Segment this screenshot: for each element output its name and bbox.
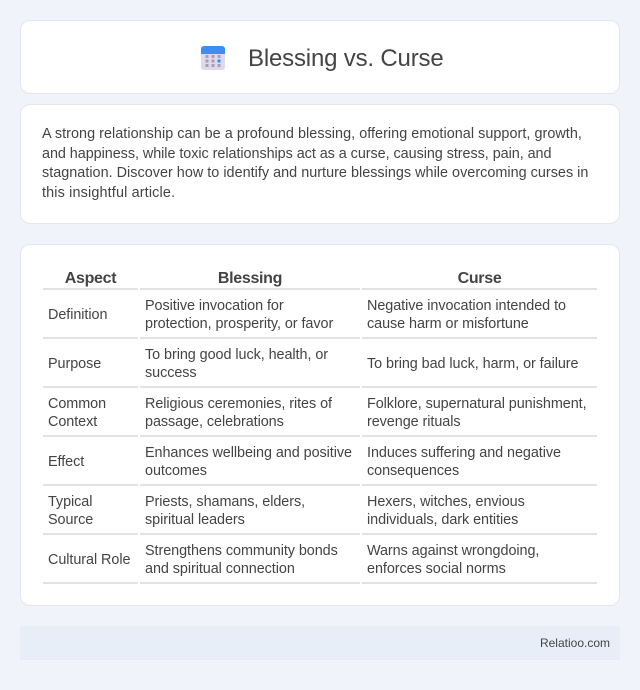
row: Cultural Role xyxy=(48,543,539,577)
intro text: this insightful article. xyxy=(42,185,175,201)
row: Purpose: Purpose xyxy=(48,356,101,372)
table header: Aspect xyxy=(65,270,116,287)
table header: Curse xyxy=(458,270,501,287)
intro text: stagnation. Discover how to identify and nurture blessings while overcoming curses in xyxy=(42,165,588,181)
title: Blessing vs. Curse xyxy=(248,45,444,72)
row: Cultural Role: Strengthens community bonds xyxy=(145,543,338,559)
row: Effect: consequences xyxy=(367,463,459,479)
row: Common Context: revenge rituals xyxy=(367,414,460,430)
row: Cultural Role: and spiritual connection xyxy=(145,561,295,577)
row: Typical Source: Typical xyxy=(48,494,92,510)
row: Definition: protection, prosperity, or favor xyxy=(145,316,333,332)
intro text: and happiness, while toxic relationships act as a curse, causing stress, pain, and xyxy=(42,146,551,162)
row: Common Context: Folklore, supernatural punishment, xyxy=(367,396,587,412)
row: Purpose xyxy=(48,347,578,381)
row: Typical Source: Priests, shamans, elders, xyxy=(145,494,305,510)
row: Common Context: Context xyxy=(48,414,97,430)
intro text xyxy=(42,126,588,201)
panel: introduction xyxy=(20,104,620,224)
row: Typical Source: Hexers, witches, envious xyxy=(367,494,525,510)
row: Definition xyxy=(48,298,566,332)
row: Common Context: Common xyxy=(48,396,106,412)
table header: Blessing xyxy=(218,270,282,287)
row: Definition: cause harm or misfortune xyxy=(367,316,529,332)
icon: calendar xyxy=(201,46,225,70)
footer text: Relatioo.com xyxy=(540,636,610,650)
header card xyxy=(20,20,620,94)
intro text: A strong relationship can be a profound blessing, offering emotional support, growth, xyxy=(42,126,582,142)
row: Typical Source: Source xyxy=(48,512,93,528)
row: Typical Source: individuals, dark entities xyxy=(367,512,518,528)
row: Typical Source xyxy=(48,494,525,528)
row: Effect: Enhances wellbeing and positive xyxy=(145,445,352,461)
row: Cultural Role: Cultural Role xyxy=(48,552,130,568)
row: Purpose: To bring bad luck, harm, or failure xyxy=(367,356,578,372)
row: Effect: Induces suffering and negative xyxy=(367,445,561,461)
row: Common Context: passage, celebrations xyxy=(145,414,284,430)
row: Typical Source: spiritual leaders xyxy=(145,512,245,528)
row: Definition: Negative invocation intended to xyxy=(367,298,566,314)
footer bar xyxy=(20,626,620,660)
row: Effect xyxy=(48,445,561,479)
row: Cultural Role: Warns against wrongdoing, xyxy=(367,543,539,559)
row: Common Context: Religious ceremonies, rites of xyxy=(145,396,332,412)
row: Effect: Effect xyxy=(48,454,84,470)
row: Definition: Definition xyxy=(48,307,107,323)
row: Effect: outcomes xyxy=(145,463,207,479)
row: Definition: Positive invocation for xyxy=(145,298,284,314)
table header xyxy=(65,270,502,287)
row: Cultural Role: enforces social norms xyxy=(367,561,506,577)
row: Purpose: To bring good luck, health, or xyxy=(145,347,328,363)
row: Purpose: success xyxy=(145,365,197,381)
panel: comparison table xyxy=(20,244,620,606)
row: Common Context xyxy=(48,396,587,430)
